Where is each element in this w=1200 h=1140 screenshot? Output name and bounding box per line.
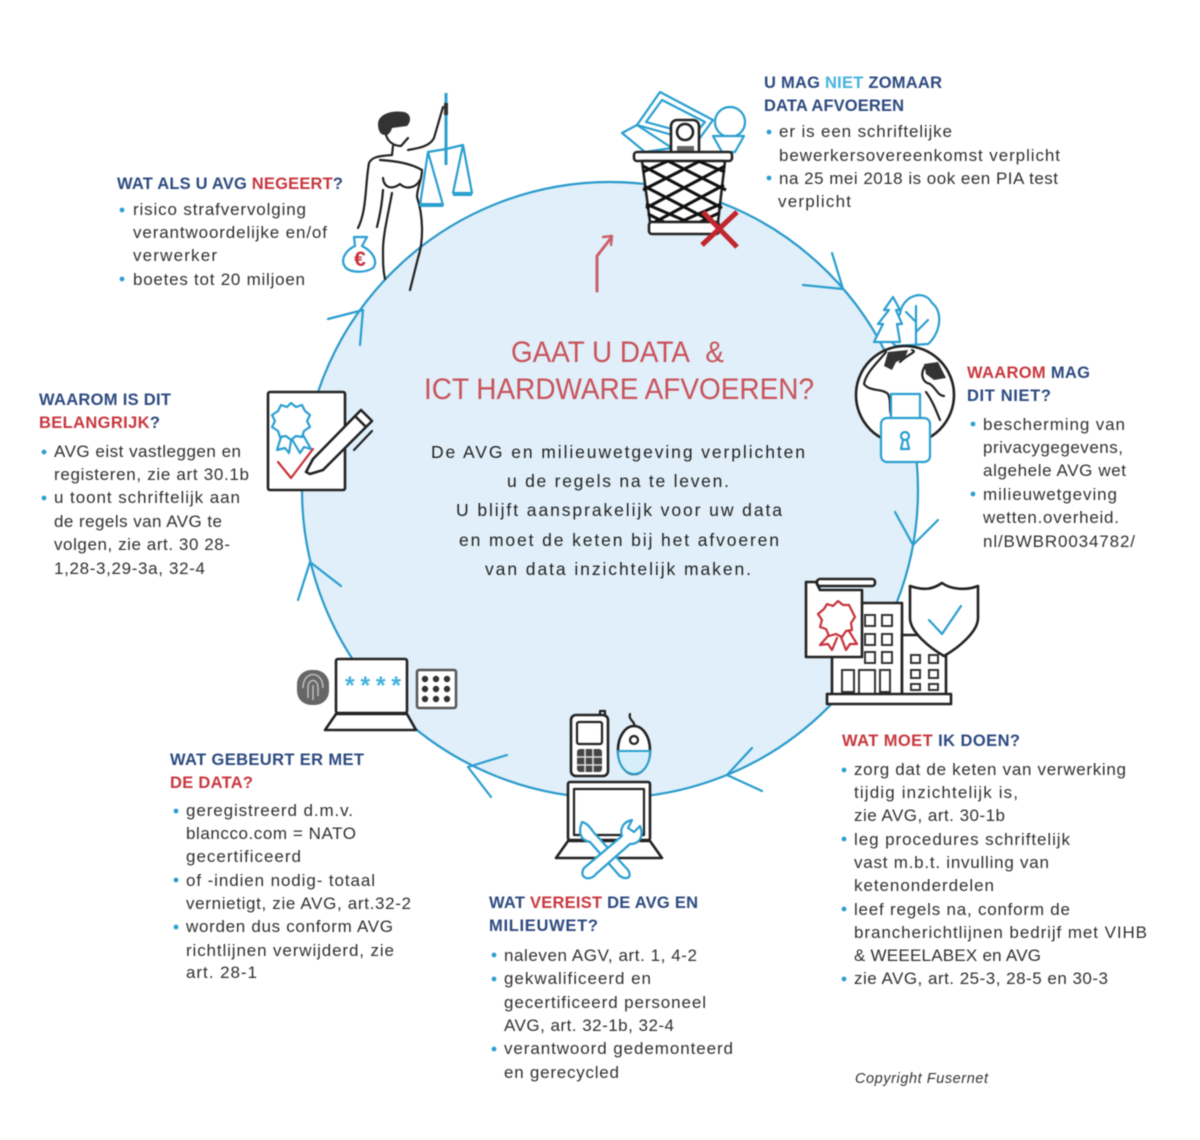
bullet list: negeert: boetes tot 20 miljoen [133, 270, 305, 289]
heading: negeert: WAT ALS U AVG NEGEERT? [117, 175, 343, 193]
bullet list: belangrijk [42, 442, 249, 578]
heading: belangrijk: WAAROM IS DIT [39, 391, 171, 409]
bullet list: wat moet ik doen: & WEEELABEX en AVG [854, 946, 1041, 965]
arrow: cycle arrow bottom right [727, 748, 762, 791]
bullet list: wat vereist: naleven AGV, art. 1, 4-2 [504, 946, 697, 965]
icon: waste basket with devices [622, 92, 745, 247]
bullet list: belangrijk: volgen, zie art. 30 28- [54, 535, 230, 554]
bullet list: waarom mag: privacygegevens, [983, 438, 1123, 457]
bullet list: wat gebeurt: richtlijnen verwijderd, zie [186, 941, 394, 960]
title: ICT HARDWARE AFVOEREN? [424, 373, 814, 406]
bullet list: wat vereist: gecertificeerd personeel [504, 993, 706, 1012]
bullet list: waarom mag: algehele AVG wet [983, 461, 1126, 480]
bullet list: negeert: risico strafvervolging [133, 200, 306, 219]
title: GAAT U DATA & [511, 336, 724, 369]
heading: wat gebeurt: DE DATA? [170, 774, 253, 792]
icon: fingerprint [297, 670, 329, 705]
bullet list: wat moet ik doen: tijdig inzichtelijk is, [854, 783, 1018, 802]
heading: wat gebeurt: WAT GEBEURT ER MET [170, 751, 364, 769]
bullet list: belangrijk: AVG eist vastleggen en [54, 442, 241, 461]
icon: laptop with password, fingerprint and keypad [297, 659, 456, 730]
central cycle circle [302, 182, 918, 798]
bullet list: wat moet ik doen: brancherichtlijnen bedrijf met VIHB [854, 923, 1147, 942]
bullet list: wat moet ik doen: ketenonderdelen [854, 876, 994, 895]
icon: certificate, building and shield [806, 579, 978, 704]
arrow: cycle arrow right [895, 512, 938, 545]
heading: u mag niet: DATA AFVOEREN [764, 97, 904, 115]
bullet list: u mag niet: bewerkersovereenkomst verplicht [779, 146, 1060, 165]
bullet list: wat gebeurt: of -indien nodig- totaal [186, 871, 375, 890]
heading: waarom mag [967, 364, 1090, 405]
icon: lady justice [343, 93, 472, 290]
bullet list: wat moet ik doen: leg procedures schriftelijk [854, 830, 1070, 849]
text block: wat moet ik doen [842, 732, 1147, 988]
bullet list: belangrijk: registeren, zie art 30.1b [54, 465, 249, 484]
bullet list: wat vereist: en gerecycled [504, 1063, 619, 1082]
heading: waarom mag: WAAROM MAG [967, 364, 1090, 382]
text block: wat als u avg negeert [117, 175, 343, 289]
heading: wat moet ik doen: WAT MOET IK DOEN? [842, 732, 1020, 750]
central text block [431, 442, 805, 579]
bullet list: wat vereist [492, 946, 733, 1082]
bullet list: wat vereist: gekwalificeerd en [504, 969, 651, 988]
bullet list: belangrijk: de regels van AVG te [54, 512, 222, 531]
bullet list: wat moet ik doen: leef regels na, conform de [854, 900, 1070, 919]
bullet list: waarom mag: wetten.overheid. [982, 508, 1119, 527]
bullet list: wat vereist: AVG, art. 32-1b, 32-4 [504, 1016, 674, 1035]
heading: u mag niet [764, 74, 942, 115]
bullet list: wat gebeurt: vernietigt, zie AVG, art.32-2 [186, 894, 411, 913]
bullet list: belangrijk: 1,28-3,29-3a, 32-4 [54, 559, 205, 578]
bullet list: waarom mag: nl/BWBR0034782/ [983, 532, 1135, 551]
bullet list: waarom mag [971, 415, 1135, 551]
arrow: cycle arrow top right [803, 253, 843, 289]
icon: phone, mouse, laptop and tools [556, 711, 662, 878]
icon: euro money bag [343, 237, 375, 272]
arrow: cycle arrow bottom left [468, 755, 507, 797]
central text block: u de regels na te leven. [507, 471, 729, 491]
bullet list: wat gebeurt: worden dus conform AVG [185, 917, 393, 936]
heading: belangrijk [39, 391, 171, 432]
heading: belangrijk: BELANGRIJK? [39, 414, 160, 432]
icon: keypad [417, 670, 456, 708]
bullet list: u mag niet [767, 122, 1060, 211]
bullet list: waarom mag: bescherming van [983, 415, 1125, 434]
central text block: van data inzichtelijk maken. [485, 559, 751, 579]
arrow: red start arrow [597, 236, 612, 291]
bullet list: negeert [120, 200, 327, 289]
text block: waarom is dit belangrijk [39, 391, 249, 578]
heading: u mag niet: U MAG NIET ZOMAAR [764, 74, 942, 92]
bullet list: wat gebeurt: geregistreerd d.m.v. [186, 801, 353, 820]
bullet list: wat gebeurt [174, 801, 411, 982]
text block: u mag niet zomaar [764, 74, 1060, 211]
bullet list: wat moet ik doen: vast m.b.t. invulling van [854, 853, 1049, 872]
heading: wat gebeurt [170, 751, 364, 792]
bullet list: wat vereist: verantwoord gedemonteerd [504, 1039, 733, 1058]
text block: wat gebeurt er met de data [170, 751, 411, 982]
arrow: cycle arrow top left [328, 310, 363, 345]
icon: laptop with password, fingerprint and keypad: **** [345, 672, 401, 700]
icon: euro money bag: € [354, 248, 366, 271]
heading: wat vereist [489, 894, 698, 935]
bullet list: wat gebeurt: gecertificeerd [186, 847, 301, 866]
heading: waarom mag: DIT NIET? [967, 387, 1051, 405]
text block: waarom mag dit niet [967, 364, 1135, 551]
central text block: De AVG en milieuwetgeving verplichten [431, 442, 805, 462]
bullet list: u mag niet: er is een schriftelijke [779, 122, 952, 141]
central text block: en moet de keten bij het afvoeren [459, 530, 779, 550]
arrow: cycle arrow left [298, 562, 341, 600]
text block: wat vereist de avg [489, 894, 733, 1082]
icon: trees on globe with padlock [856, 295, 954, 462]
bullet list: negeert: verantwoordelijke en/of [133, 223, 327, 242]
bullet list: belangrijk: u toont schriftelijk aan [54, 488, 240, 507]
heading: wat vereist: MILIEUWET? [489, 917, 598, 935]
icon: signed checklist document with pen [268, 392, 372, 490]
bullet list: wat moet ik doen [842, 760, 1147, 988]
bullet list: u mag niet: na 25 mei 2018 is ook een PIA test [779, 169, 1058, 188]
bullet list: wat gebeurt: blancco.com = NATO [186, 824, 356, 843]
icon: red cross [702, 212, 737, 247]
bullet list: wat moet ik doen: zie AVG, art. 30-1b [854, 806, 1005, 825]
bullet list: wat moet ik doen: zie AVG, art. 25-3, 28-5 en 30-3 [854, 969, 1108, 988]
bullet list: waarom mag: milieuwetgeving [983, 485, 1117, 504]
bullet list: wat gebeurt: art. 28-1 [186, 963, 257, 982]
bullet list: wat moet ik doen: zorg dat de keten van verwerking [854, 760, 1126, 779]
bullet list: negeert: verwerker [133, 246, 217, 265]
central text block: U blijft aansprakelijk voor uw data [456, 500, 782, 520]
title [424, 336, 814, 406]
copyright note: Copyright Fusernet [855, 1071, 989, 1087]
bullet list: u mag niet: verplicht [778, 192, 851, 211]
heading: wat vereist: WAT VEREIST DE AVG EN [489, 894, 698, 912]
